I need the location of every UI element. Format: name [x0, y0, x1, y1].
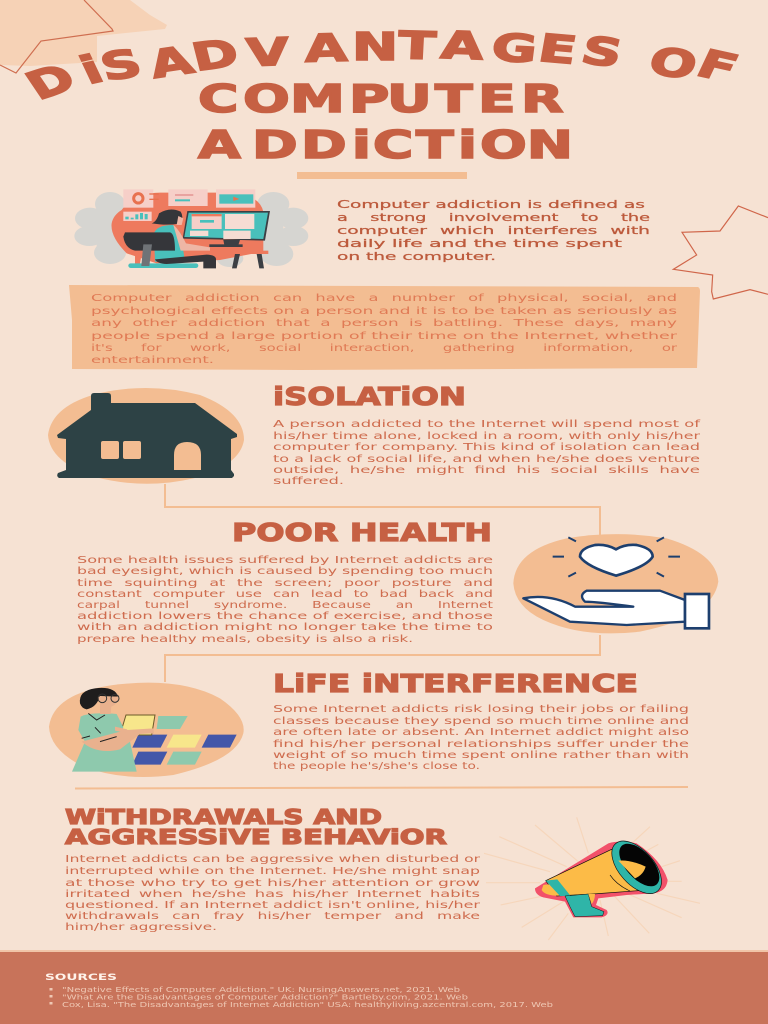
section: withdrawals and aggressive behavior: him/her aggressive. — [65, 922, 217, 933]
title: OF — [643, 39, 745, 92]
section: life interference — [273, 669, 689, 772]
illustration: person at computer — [74, 189, 308, 268]
section: poor health: bad eyesight, which is caused by spending too much — [77, 566, 493, 577]
section: withdrawals and aggressive behavior: at those who try to get his/her attention or grow — [65, 878, 480, 889]
section: life interference: find his/her personal relationships suffer under the — [273, 739, 689, 750]
section: poor health: with an addiction might no longer take the time to — [77, 622, 493, 633]
intro text: daily life and the time spent — [337, 238, 622, 250]
section: poor health: addiction lowers the chance of exercise, and those — [77, 611, 493, 622]
section: isolation: to a lack of social life, and when he/she does venture — [273, 454, 700, 465]
decorative star: top left — [0, 0, 167, 73]
panel: overview: entertainment. — [91, 355, 214, 366]
section: isolation: his/her time alone, locked in a room, with only his/her — [273, 431, 700, 442]
panel: footer sources — [0, 950, 768, 1024]
panel: footer sources: "Negative Effects of Computer Addiction." UK: NursingAnswers.net, 2021. Web — [62, 986, 461, 994]
section: withdrawals and aggressive behavior: interrupted while on the Internet. He/she might snap — [65, 866, 480, 877]
icon: hand holding heart — [513, 534, 718, 633]
section: isolation: outside, he/she might find his social skills have — [273, 465, 700, 476]
section: poor health: time squinting at the screen; poor posture and — [77, 578, 493, 589]
section: withdrawals and aggressive behavior: Internet addicts can be aggressive when disturbed or — [65, 854, 480, 865]
icon: megaphone — [484, 817, 700, 940]
section: withdrawals and aggressive behavior — [65, 805, 480, 933]
section: life interference: the people he's/she's close to. — [273, 761, 480, 772]
section: poor health: constant computer use can lead to bad back and — [77, 589, 493, 600]
title — [17, 23, 751, 168]
section: withdrawals and aggressive behavior: AGGRESSiVE BEHAViOR — [65, 825, 447, 849]
section: life interference: LiFE iNTERFERENCE — [273, 669, 638, 698]
section: life interference: are often late or absent. An Internet addict might also — [273, 727, 689, 738]
decorative star: right outline — [673, 206, 768, 299]
intro text — [337, 199, 650, 263]
section: withdrawals and aggressive behavior: withdrawals can fray his/her temper and make — [65, 911, 480, 922]
section: poor health: Some health issues suffered by Internet addicts are — [77, 555, 493, 566]
panel: footer sources: SOURCES — [45, 973, 117, 983]
title: DiSADVANTAGES — [17, 23, 627, 109]
title: COMPUTER — [198, 77, 563, 122]
intro text: a strong involvement to the — [337, 212, 650, 224]
section: poor health: prepare healthy meals, obesity is also a risk. — [77, 634, 413, 645]
panel: overview: Computer addiction can have a number of physical, social, and — [91, 293, 677, 304]
section: poor health: carpal tunnel syndrome. Because an Internet — [77, 600, 493, 611]
section: isolation: A person addicted to the Internet will spend most of — [273, 419, 701, 430]
connector lines — [165, 484, 600, 682]
intro text: computer which interferes with — [337, 225, 650, 237]
title: ADDiCTiON — [198, 123, 573, 168]
divider — [75, 787, 688, 788]
section: isolation — [273, 382, 701, 487]
section: withdrawals and aggressive behavior: questioned. If an Internet addict isn't online, his/her — [65, 900, 480, 911]
icon: house — [48, 388, 244, 484]
title underline — [297, 172, 467, 179]
section: isolation: iSOLATiON — [273, 382, 466, 411]
panel: overview — [69, 285, 700, 370]
intro text: on the computer. — [337, 251, 496, 263]
section: poor health: POOR HEALTH — [232, 518, 492, 547]
panel: overview: psychological effects on a person and it is to be taken as seriously as — [91, 306, 677, 317]
section: life interference: classes because they spend so much time online and — [273, 716, 689, 727]
panel: footer sources: "What Are the Disadvantages of Computer Addiction?" Bartleby.com, 2021. Web — [62, 994, 469, 1002]
panel: overview: it's for work, social interaction, gathering information, or — [91, 343, 678, 354]
section: withdrawals and aggressive behavior: WiTHDRAWALS AND — [65, 805, 382, 829]
section: isolation: computer for company. This kind of isolation can lead — [273, 442, 700, 453]
section: withdrawals and aggressive behavior: irritated when he/she has his/her Internet habits — [65, 889, 480, 900]
section: life interference: Some Internet addicts risk losing their jobs or failing — [273, 704, 689, 715]
section: poor health — [77, 518, 493, 645]
panel: overview: any other addiction that a person is battling. These days, many — [91, 318, 677, 329]
intro text: Computer addiction is defined as — [337, 199, 645, 211]
panel: overview: people spend a large portion of their time on the Internet, whether — [91, 331, 679, 342]
icon: person with tablet and cards — [49, 683, 244, 777]
section: isolation: suffered. — [273, 476, 344, 487]
panel: footer sources: Cox, Lisa. "The Disadvantages of Internet Addiction" USA: healthyliving.azcentral.com, 2017. Web — [62, 1001, 554, 1009]
section: life interference: weight of so much time spent online rather than with — [273, 750, 689, 761]
